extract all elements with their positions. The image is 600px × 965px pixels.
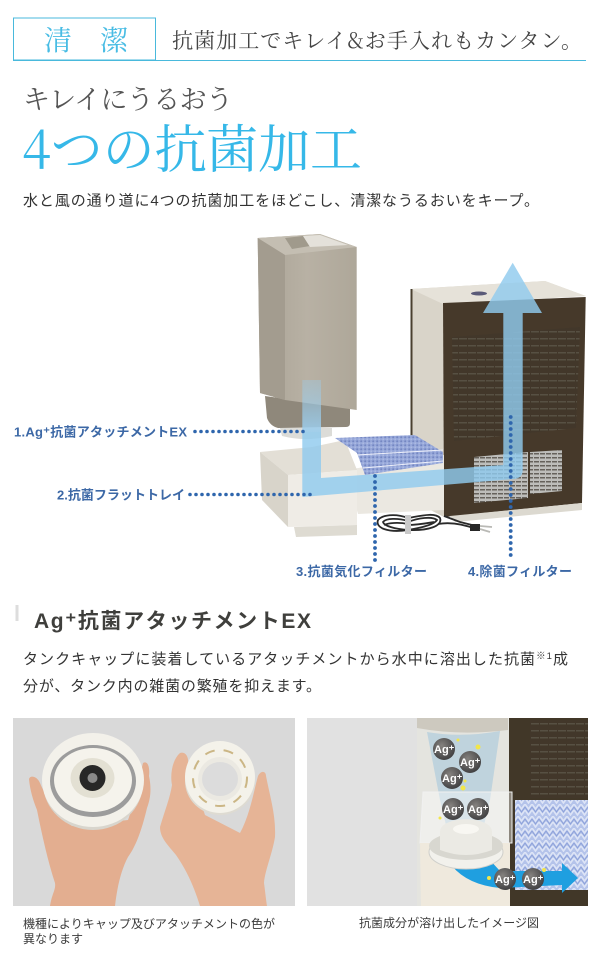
main unit	[410, 281, 586, 522]
caption left: 異なります	[23, 932, 83, 946]
filter	[335, 435, 443, 475]
caption left: 機種によりキャップ及びアタッチメントの色が	[23, 916, 275, 931]
silver ions: Ag⁺	[460, 757, 481, 769]
attachment ring	[185, 741, 255, 815]
water tank	[258, 234, 357, 439]
description text: 成	[553, 651, 568, 668]
silver ions: Ag⁺	[468, 804, 489, 816]
silver ions: Ag⁺	[443, 804, 464, 816]
section header: 清潔	[13, 18, 586, 60]
label 2: 2.抗菌フラットトレイ	[57, 488, 185, 502]
airflow arrow	[302, 263, 542, 497]
silver ions: Ag⁺	[442, 773, 463, 785]
blue flow arrow	[452, 858, 578, 893]
photo: antibacterial component illustration	[307, 718, 588, 906]
section header: 清潔: 抗菌加工でキレイ&お手入れもカンタン。	[172, 25, 582, 55]
section heading: Ag⁺抗菌アタッチメントEX	[34, 610, 311, 633]
label 1: 1.Ag⁺抗菌アタッチメントEX	[14, 424, 187, 440]
silver ions	[433, 738, 544, 890]
attachment cap	[429, 819, 503, 869]
sparkles	[438, 738, 546, 880]
caption right: 抗菌成分が溶け出したイメージ図	[359, 915, 539, 930]
silver ions: Ag⁺	[523, 874, 544, 886]
title: 4つの抗菌加工	[22, 108, 362, 183]
subtitle: キレイにうるおう	[23, 78, 233, 117]
left hand	[29, 762, 150, 906]
description text: ※1	[536, 651, 552, 662]
dotted leader 1	[195, 430, 306, 433]
description text: 分が、タンク内の雑菌の繁殖を抑えます。	[23, 678, 321, 695]
intro text: 水と風の通り道に4つの抗菌加工をほどこし、清潔なうるおいをキープ。	[23, 192, 539, 210]
water tray	[260, 440, 444, 537]
description text	[23, 651, 568, 695]
right hand	[160, 753, 275, 906]
power cord	[378, 515, 492, 534]
section header: 清潔: 清 潔	[44, 19, 128, 59]
description text: タンクキャップに装着しているアタッチメントから水中に溶出した抗菌	[23, 651, 535, 668]
dotted leader 4	[509, 417, 513, 557]
caption left	[23, 916, 275, 946]
cap	[42, 733, 144, 830]
tray	[420, 792, 512, 843]
product diagram	[14, 234, 586, 579]
label 3: 3.抗菌気化フィルター	[296, 564, 427, 579]
dotted leader 3	[373, 476, 377, 563]
silver ions: Ag⁺	[434, 744, 455, 756]
dotted leader 2	[190, 493, 312, 496]
label 4: 4.除菌フィルター	[468, 564, 572, 579]
filter	[515, 800, 588, 890]
silver ions: Ag⁺	[495, 874, 516, 886]
photo: hands holding cap and attachment	[13, 718, 295, 906]
